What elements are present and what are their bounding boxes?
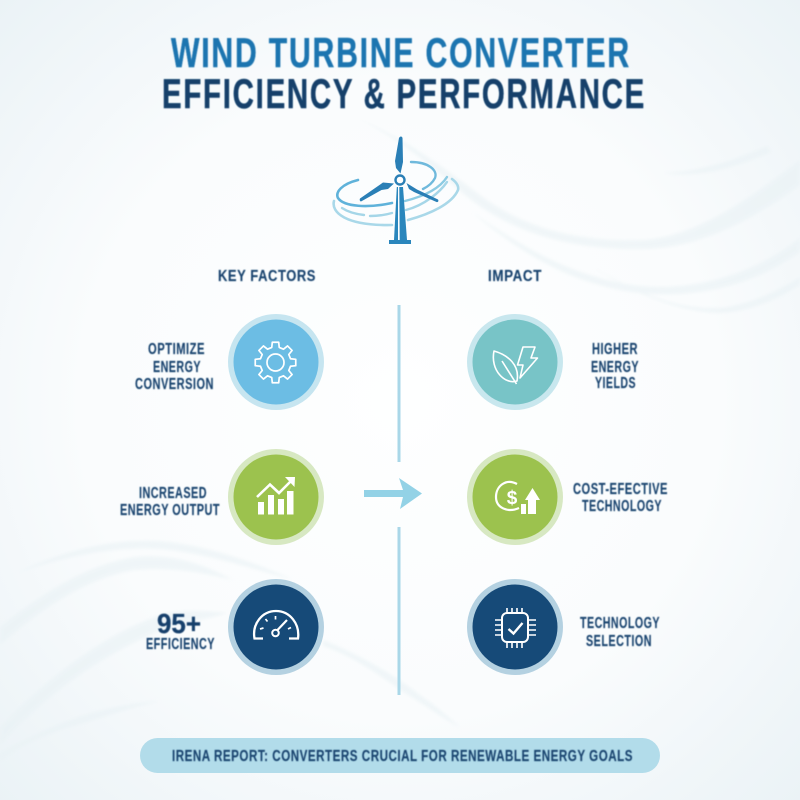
text: 95+ — [157, 608, 201, 639]
icon: growth chart — [257, 477, 295, 514]
panel: increased energy output — [120, 449, 324, 545]
text: HIGHER — [592, 341, 638, 358]
circle — [467, 314, 563, 410]
hub — [396, 176, 404, 184]
text: TECHNOLOGY — [580, 615, 660, 632]
banner text: IRENA REPORT: CONVERTERS CRUCIAL FOR RENEWABLE ENERGY GOALS — [172, 748, 633, 765]
icon: gauge — [254, 611, 298, 638]
panel: 95+ efficiency — [146, 579, 324, 675]
column heading: key factors: KEY FACTORS — [218, 268, 316, 285]
text: ENERGY OUTPUT — [120, 502, 220, 519]
circle — [228, 314, 324, 410]
icon: wind turbine with swirling air — [334, 136, 458, 244]
text — [573, 481, 668, 515]
icon: dollar with arrow — [496, 482, 540, 514]
text: TECHNOLOGY — [582, 498, 662, 515]
column heading: impact: IMPACT — [488, 268, 542, 285]
text: INCREASED — [139, 485, 207, 502]
circle — [228, 449, 324, 545]
icon: dollar with arrow: $ — [507, 488, 518, 509]
blades — [395, 136, 403, 174]
text: SELECTION — [586, 633, 652, 650]
panel: cost-effective technology — [467, 449, 668, 545]
icon: chip with check — [495, 608, 536, 648]
icon: gear — [255, 342, 296, 383]
text — [146, 608, 215, 653]
banner — [140, 738, 660, 773]
text: COST-EFECTIVE — [573, 481, 668, 498]
icon: leaf and bolt — [493, 347, 538, 384]
title — [162, 29, 646, 117]
swirl arcs — [334, 162, 458, 225]
arrow — [364, 478, 422, 509]
text: YIELDS — [595, 375, 636, 392]
text — [135, 341, 214, 393]
center divider and arrow — [364, 305, 422, 695]
text — [580, 615, 660, 650]
text — [591, 341, 639, 392]
text: ENERGY — [153, 359, 201, 376]
panel: higher energy yields — [467, 314, 639, 410]
title line 1: WIND TURBINE CONVERTER — [171, 29, 631, 76]
panel: technology selection — [467, 579, 660, 675]
panel: optimize energy conversion — [135, 314, 324, 410]
text — [120, 485, 220, 519]
circle — [467, 449, 563, 545]
text: CONVERSION — [135, 376, 214, 393]
tower — [394, 187, 398, 240]
circle — [228, 579, 324, 675]
text: EFFICIENCY — [146, 636, 215, 653]
text: OPTIMIZE — [148, 341, 205, 358]
text: ENERGY — [591, 359, 639, 376]
circle — [467, 579, 563, 675]
